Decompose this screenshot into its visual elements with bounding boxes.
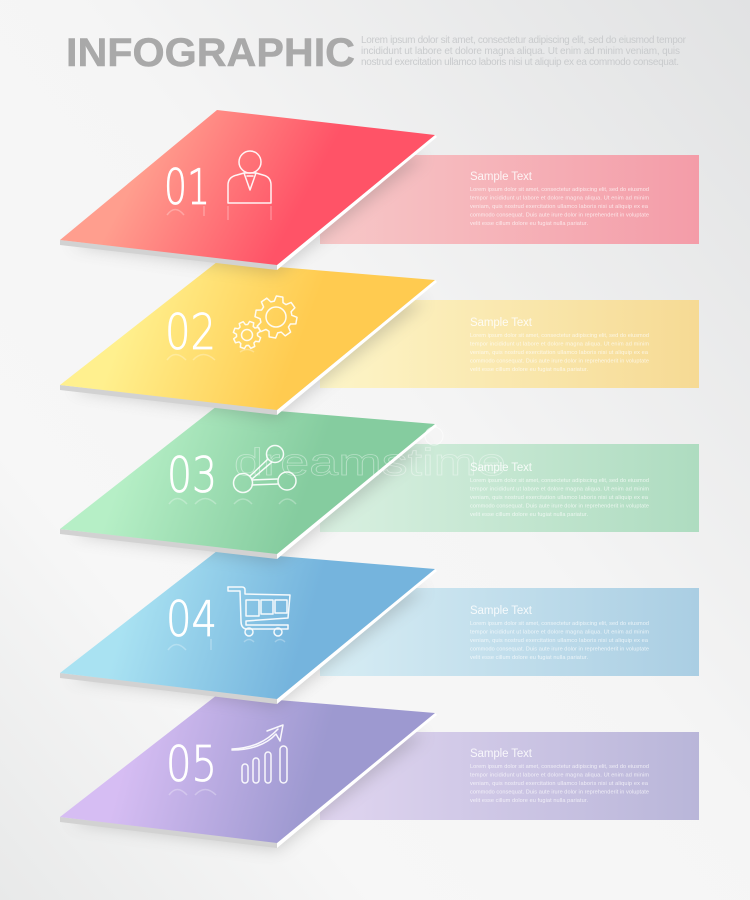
ribbon 4 [320,588,699,676]
icon: network nodes [234,446,296,492]
ribbon 5 text: Sample Text [470,748,533,760]
number 04: 04 [166,591,217,648]
ribbon 2 text: velit esse cillum dolore eu fugiat nulla pariatur. [470,367,588,373]
number 03: 03 [167,447,217,504]
ribbon 1 text: Sample Text [470,171,533,183]
ribbon 3 text: veniam, quis nostrud exercitation ullamco laboris nisi ut aliquip ex ea [470,495,649,501]
panel 2: yellow [60,262,437,418]
number 01: 01 [164,159,210,216]
number and icon reflections [167,206,296,795]
ribbon 1 text: veniam, quis nostrud exercitation ullamco laboris nisi ut aliquip ex ea [470,204,649,210]
panel 1: red [60,110,437,273]
ribbon 2 text: tempor incididunt ut labore et dolore magna aliqua. Ut enim ad minim [470,342,649,348]
ribbon 5 text: veniam, quis nostrud exercitation ullamco laboris nisi ut aliquip ex ea [470,781,649,787]
ribbon 1 text: tempor incididunt ut labore et dolore magna aliqua. Ut enim ad minim [470,196,649,202]
ribbon 4 text: Lorem ipsum dolor sit amet, consectetur adipiscing elit, sed do eiusmod [470,621,649,627]
ribbon 5 text: Lorem ipsum dolor sit amet, consectetur adipiscing elit, sed do eiusmod [470,764,649,770]
intro text block: incididunt ut labore et dolore magna aliqua. Ut enim ad minim veniam, quis [361,46,680,57]
panel 3: green [60,406,437,562]
ribbon 3 text [470,462,649,518]
ribbon 4 text: commodo consequat. Duis aute irure dolor in reprehenderit in voluptate [470,646,649,652]
ribbon 2 text: Lorem ipsum dolor sit amet, consectetur adipiscing elit, sed do eiusmod [470,333,649,339]
intro text block: Lorem ipsum dolor sit amet, consectetur adipiscing elit, sed do eiusmod tempor [361,35,687,46]
icon: business person [228,151,271,203]
ribbon 5 text: velit esse cillum dolore eu fugiat nulla pariatur. [470,798,588,804]
ribbon 5 text: commodo consequat. Duis aute irure dolor in reprehenderit in voluptate [470,790,649,796]
ribbon 1 text: commodo consequat. Duis aute irure dolor in reprehenderit in voluptate [470,212,649,218]
ribbon 4 text: velit esse cillum dolore eu fugiat nulla pariatur. [470,655,588,661]
ribbon 4 text [470,605,649,661]
intro text block [361,35,687,68]
ribbon 3 text: Sample Text [470,462,533,474]
ribbon 5 text: tempor incididunt ut labore et dolore magna aliqua. Ut enim ad minim [470,772,649,778]
ribbon 1 [320,155,699,244]
number 02: 02 [165,304,216,361]
ribbon 3 text: velit esse cillum dolore eu fugiat nulla pariatur. [470,512,588,518]
ribbon 2 text: Sample Text [470,317,533,329]
ribbon 2 [320,300,699,388]
watermark [234,427,506,484]
ribbon 2 text: commodo consequat. Duis aute irure dolor in reprehenderit in voluptate [470,358,649,364]
ribbon 4 text: tempor incididunt ut labore et dolore magna aliqua. Ut enim ad minim [470,630,649,636]
ribbon 3 text: Lorem ipsum dolor sit amet, consectetur adipiscing elit, sed do eiusmod [470,478,649,484]
watermark: dreamstime [234,442,506,484]
ribbon 2 text: veniam, quis nostrud exercitation ullamco laboris nisi ut aliquip ex ea [470,350,649,356]
ribbon 4 text: Sample Text [470,605,533,617]
icon: shopping cart [228,587,290,636]
panel 5: purple [60,695,437,850]
icon: gears [229,293,300,353]
ribbon 3 text: tempor incididunt ut labore et dolore magna aliqua. Ut enim ad minim [470,486,649,492]
panel 4: blue [60,551,437,706]
ribbon 5 [320,732,699,820]
number 05: 05 [166,736,217,793]
ribbon 3 text: commodo consequat. Duis aute irure dolor in reprehenderit in voluptate [470,504,649,510]
ribbon 4 text: veniam, quis nostrud exercitation ullamco laboris nisi ut aliquip ex ea [470,638,649,644]
title: INFOGRAPHIC [66,31,355,75]
ribbon 1 text [470,171,649,227]
ribbon 1 text: Lorem ipsum dolor sit amet, consectetur adipiscing elit, sed do eiusmod [470,187,649,193]
ribbon 3 [320,444,699,532]
ribbon 5 text [470,748,649,804]
ribbon 2 text [470,317,649,373]
icon: growth chart [232,725,287,783]
ribbon 1 text: velit esse cillum dolore eu fugiat nulla pariatur. [470,221,588,227]
intro text block: nostrud exercitation ullamco laboris nisi ut aliquip ex ea commodo consequat. [361,57,679,68]
